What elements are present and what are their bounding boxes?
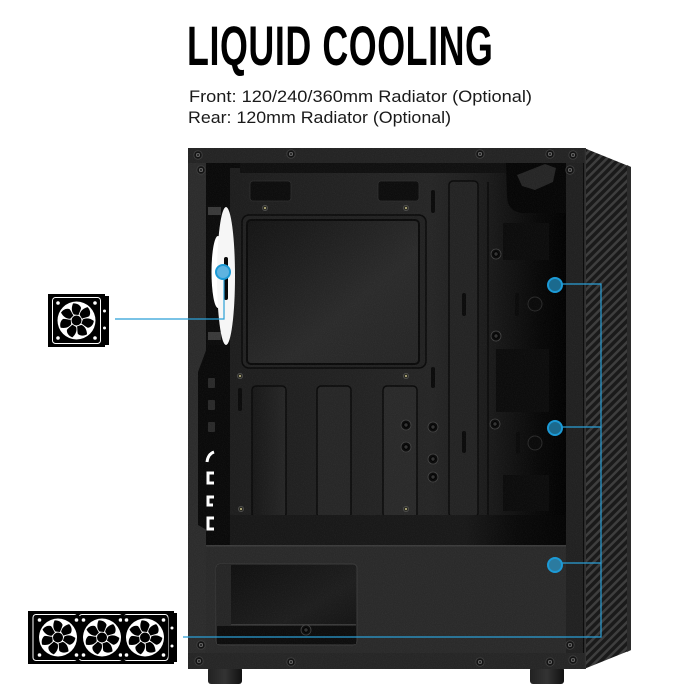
top rail <box>188 148 584 163</box>
top cutouts <box>250 181 419 201</box>
case screws <box>194 150 577 666</box>
icon: 120mm radiator <box>48 294 109 347</box>
motherboard cutout <box>242 215 426 368</box>
expansion slots row <box>252 181 478 518</box>
title: LIQUID COOLING <box>187 14 493 77</box>
pc case <box>188 148 631 684</box>
subtitle: radiator support <box>188 87 532 127</box>
psu window <box>216 564 357 645</box>
bottom rail <box>188 653 584 669</box>
rear bracket with cable slots <box>198 345 230 535</box>
interior <box>206 163 566 545</box>
subtitle: radiator support: Front: 120/240/360mm Radiator (Optional) <box>189 87 532 106</box>
psu shroud <box>206 545 566 653</box>
right cable panel <box>488 182 566 517</box>
small slots <box>238 190 520 454</box>
marker: front middle <box>548 421 562 435</box>
left pillar <box>188 163 206 653</box>
callout lines: front radiator <box>183 284 601 637</box>
top mesh <box>240 163 566 173</box>
case frame <box>188 148 584 669</box>
motherboard tray <box>230 168 566 515</box>
standoffs and screw holes <box>237 205 542 512</box>
top cable bundle <box>506 163 566 213</box>
subtitle: radiator support: Rear: 120mm Radiator (Optional) <box>188 108 451 127</box>
side panel: carbon fibre <box>584 148 631 669</box>
rear fan <box>207 205 235 347</box>
metal grain texture <box>188 148 584 669</box>
callout lines: rear radiator <box>115 272 224 319</box>
front pillar <box>566 148 584 669</box>
right square cutouts <box>496 223 549 511</box>
marker: front top <box>548 278 562 292</box>
marker: front bottom <box>548 558 562 572</box>
feet <box>208 667 564 684</box>
marker: rear fan <box>216 265 230 279</box>
icon: 360mm radiator <box>28 611 177 664</box>
mesh vent strip <box>230 515 566 545</box>
